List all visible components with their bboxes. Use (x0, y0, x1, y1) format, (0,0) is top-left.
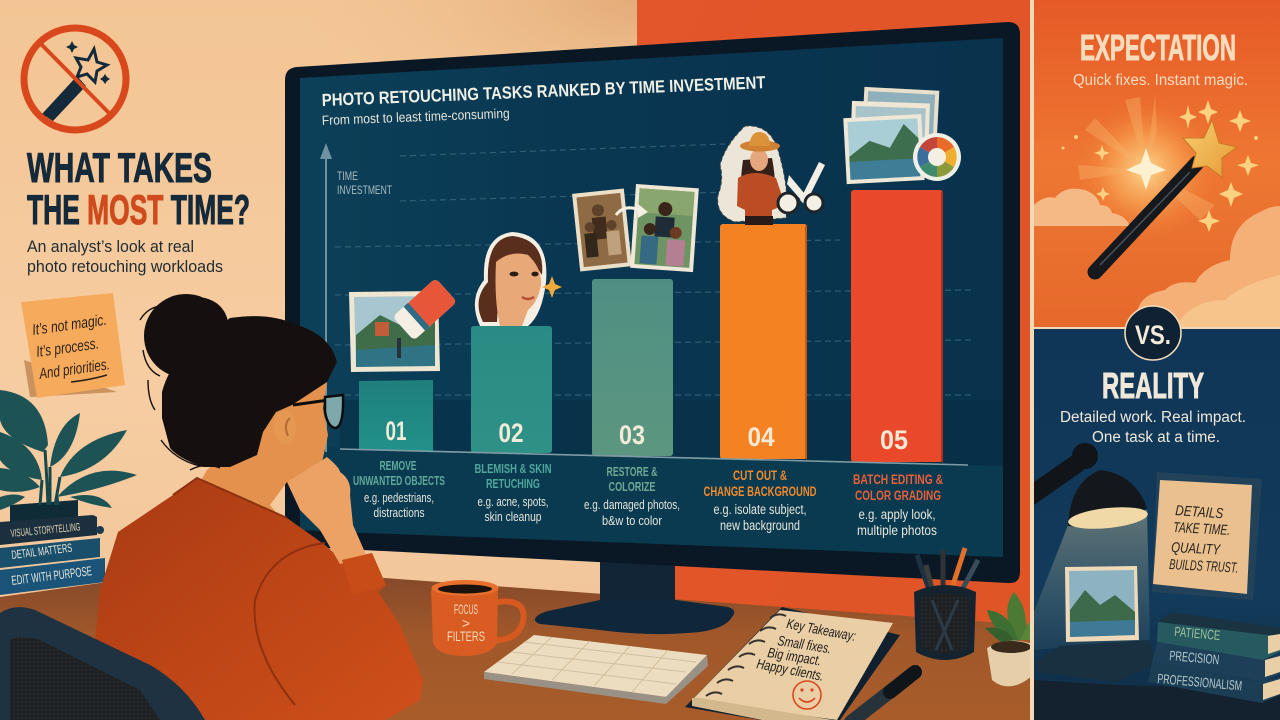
coffee mug: > (462, 615, 470, 631)
heading: REALITY (1102, 365, 1204, 406)
task label 01: distractions (374, 505, 425, 520)
sticky note: It’s not magic. (31, 312, 108, 339)
bar 05: 05 (880, 425, 908, 455)
task label 05 (853, 472, 943, 538)
task label 01 (353, 458, 445, 520)
bar 01 (359, 380, 433, 451)
coffee mug: FILTERS (447, 628, 485, 644)
task label 05: COLOR GRADING (855, 488, 941, 503)
illustration: lamp (1034, 443, 1150, 650)
task label 02: RETUCHING (486, 476, 540, 491)
small potted plant (985, 592, 1030, 686)
computer monitor (285, 22, 1020, 583)
chart title: PHOTO RETOUCHING TASKS RANKED BY TIME INVESTMENT (321, 72, 766, 110)
stack of books: EDIT WITH PURPOSE (11, 563, 93, 588)
y axis label: TIME (337, 169, 358, 183)
illustration: pinned note: TAKE TIME. (1173, 520, 1231, 539)
icon: cutout woman and scissors (718, 126, 825, 225)
icon: photo stack and color wheel (843, 87, 961, 184)
bar 04 (720, 224, 807, 459)
task label 02: skin cleanup (484, 509, 542, 524)
bar 03 (592, 279, 673, 456)
icon: restored family photos (572, 184, 699, 272)
task label 03: COLORIZE (608, 479, 656, 494)
illustration: pinned note: BUILDS TRUST. (1169, 557, 1239, 577)
illustration: pinned note: DETAILS (1175, 503, 1224, 522)
notebook with key takeaway: Big impact. (767, 644, 822, 668)
illustration: magic wand (1095, 120, 1237, 272)
desk surface (0, 577, 1030, 720)
illustration: pinned note: QUALITY (1171, 540, 1222, 559)
illustration: desk (1034, 680, 1280, 720)
stack of books: DETAIL MATTERS (11, 541, 73, 562)
analyst face and neck (200, 382, 328, 520)
vs badge: VS. (1135, 320, 1171, 350)
coffee mug: FOCUS (454, 601, 478, 617)
bar 01: 01 (386, 416, 406, 446)
icon: photo with eraser (349, 278, 457, 372)
chart subtitle: From most to least time-consuming (322, 106, 510, 128)
vs badge (1125, 306, 1181, 360)
notebook with key takeaway: Happy clients. (755, 655, 825, 684)
illustration: pinned note (1152, 472, 1262, 600)
divider (1030, 0, 1034, 720)
icon: no magic wand (24, 28, 126, 130)
subtitle: An analyst’s look at real (27, 238, 194, 256)
task label 05: BATCH EDITING & (853, 472, 943, 487)
task label 03 (584, 464, 680, 528)
bar 02: 02 (498, 418, 524, 448)
title: WHAT TAKES (27, 144, 212, 191)
analyst glasses (293, 395, 343, 428)
panel: bar chart screen (300, 38, 1003, 557)
panel: reality (1034, 327, 1280, 720)
task label 01: e.g. pedestrians, (364, 490, 434, 505)
y axis label (337, 169, 392, 197)
task label 04 (704, 468, 817, 533)
bar 02 (471, 326, 552, 453)
title (27, 144, 250, 233)
illustration: framed landscape (1065, 566, 1139, 642)
task label 04: e.g. isolate subject, (714, 502, 806, 517)
analyst hair (140, 294, 337, 470)
illustration: books (1148, 612, 1280, 703)
task label 05: multiple photos (857, 523, 937, 538)
stack of books (0, 515, 105, 595)
pen (851, 672, 915, 720)
task label 02: BLEMISH & SKIN (474, 461, 552, 476)
task label 02 (474, 461, 552, 524)
task label 04: CHANGE BACKGROUND (704, 484, 817, 499)
illustration: books: PATIENCE (1174, 624, 1221, 643)
notebook with key takeaway: Small fixes. (777, 632, 832, 656)
task label 02: e.g. acne, spots, (478, 494, 548, 509)
y axis label: INVESTMENT (337, 183, 392, 197)
illustration: clouds (1034, 189, 1280, 328)
y axis arrow (320, 143, 332, 452)
illustration: books: PRECISION (1169, 648, 1220, 667)
task label 03: RESTORE & (606, 464, 658, 479)
illustration: desk platform (1037, 640, 1155, 682)
sticky note: It’s process. (35, 335, 100, 361)
task label 01: UNWANTED OBJECTS (353, 473, 445, 488)
task label 05: e.g. apply look, (858, 507, 936, 522)
analyst hand (287, 457, 367, 564)
caption: One task at a time. (1092, 429, 1220, 446)
notebook with key takeaway: Key Takeaway: (785, 615, 857, 644)
caption: Quick fixes. Instant magic. (1073, 72, 1248, 89)
title: THE MOST TIME? (27, 186, 250, 233)
panel: expectation (1034, 0, 1280, 328)
notebook with key takeaway (685, 607, 900, 720)
task label 04: CUT OUT & (733, 468, 787, 483)
caption (1061, 410, 1245, 442)
stack of books: VISUAL STORYTELLING (10, 521, 81, 540)
office chair (0, 607, 205, 720)
computer monitor stand (535, 560, 734, 634)
subtitle: photo retouching workloads (27, 258, 223, 276)
bar 05 (851, 190, 943, 462)
panel: intro text (21, 28, 250, 398)
potted plant on books (0, 390, 137, 527)
sticky note: And priorities. (37, 356, 111, 383)
subtitle (27, 238, 223, 276)
analyst at desk (95, 294, 423, 720)
task label 01: REMOVE (380, 458, 417, 473)
icon: portrait of woman (475, 232, 562, 326)
bar 04: 04 (748, 422, 774, 452)
task label 04: new background (720, 518, 800, 533)
task label 03: e.g. damaged photos, (584, 497, 680, 512)
task label 03: b&w to color (602, 513, 663, 528)
keyboard (484, 635, 708, 704)
caption: Detailed work. Real impact. (1060, 409, 1246, 426)
sticky note (21, 293, 125, 398)
analyst sweater (95, 478, 423, 720)
illustration: magic burst (1062, 95, 1259, 240)
bar 03: 03 (619, 420, 645, 450)
coffee mug (431, 580, 524, 656)
pencil holder (914, 548, 978, 660)
